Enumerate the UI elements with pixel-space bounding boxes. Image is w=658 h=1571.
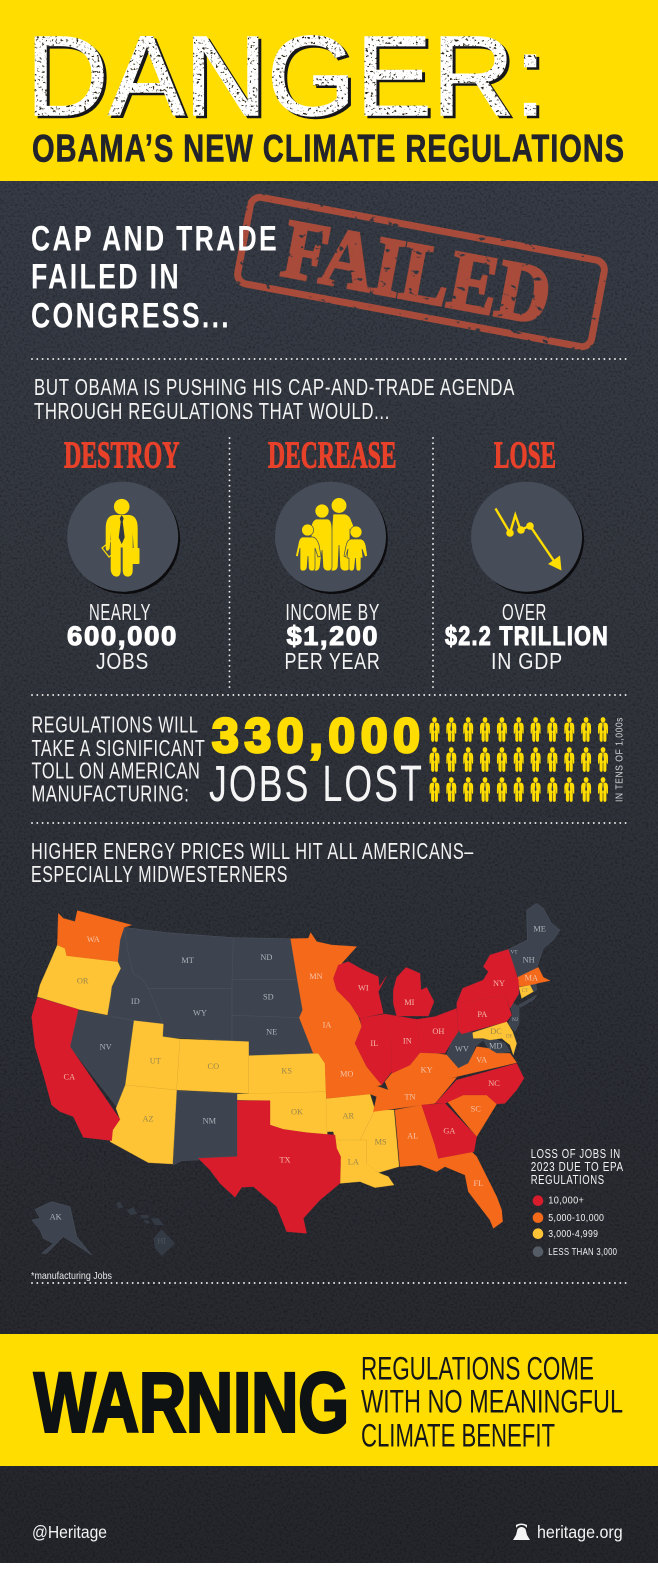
- stat: nearly 600,000 jobs: JOBS: [96, 648, 149, 674]
- intro text: THROUGH REGULATIONS THAT WOULD...: [34, 398, 390, 424]
- footer: handle: @Heritage: [32, 1522, 107, 1542]
- warning text: CLIMATE BENEFIT: [361, 1418, 555, 1454]
- header band: [0, 0, 658, 181]
- states: 10,000 or more: IN: [403, 1037, 412, 1046]
- warning band: [0, 1334, 658, 1466]
- intro text: [34, 374, 515, 424]
- map: US states: [32, 903, 560, 1256]
- stat: income by $1,200 per year: [284, 599, 380, 674]
- text: manufacturing toll: [32, 712, 206, 807]
- stamp: FAILED: FAILED: [276, 202, 558, 343]
- icon: falling chart: [471, 482, 584, 594]
- states: less than 3,000: NJ: [512, 1017, 518, 1023]
- legend items: [533, 1194, 617, 1258]
- legend title: [531, 1147, 624, 1187]
- states: 3,000 to 4,999: MS: [375, 1137, 387, 1146]
- heading: cap and trade failed: [31, 220, 279, 335]
- states: less than 3,000: HI: [157, 1236, 166, 1245]
- legend items: 3,000-4,999: [548, 1228, 598, 1240]
- states: less than 3,000: MT: [181, 956, 194, 965]
- states: 10,000 or more: WI: [358, 983, 369, 992]
- states: 5,000 to 10,000: FL: [473, 1179, 483, 1188]
- states: 5,000 to 10,000: AL: [407, 1132, 418, 1141]
- legend items: LESS THAN 3,000: [548, 1246, 617, 1258]
- legend title: REGULATIONS: [531, 1173, 605, 1187]
- states: 5,000 to 10,000: MO: [340, 1069, 353, 1078]
- states: less than 3,000: [32, 903, 560, 1256]
- states: 10,000 or more: NY: [493, 979, 505, 988]
- states: 5,000 to 10,000: VA: [476, 1055, 487, 1064]
- legend items: 10,000+: [548, 1194, 584, 1206]
- states: 10,000 or more: PA: [477, 1010, 487, 1019]
- states: 10,000 or more: GA: [443, 1126, 455, 1135]
- states: 5,000 to 10,000: [57, 911, 550, 1228]
- states: 3,000 to 4,999: UT: [150, 1056, 161, 1065]
- states: 10,000 or more: MI: [404, 998, 415, 1007]
- stat: income by $1,200 per year: INCOME BY: [285, 599, 380, 625]
- states: less than 3,000: AK: [50, 1213, 62, 1222]
- states: less than 3,000: VT: [510, 950, 518, 956]
- legend title: 2023 DUE TO EPA: [531, 1160, 624, 1174]
- stat: over $2.2 trillion in GDP: IN GDP: [491, 648, 563, 674]
- heading: energy prices: [31, 838, 474, 887]
- unit note: IN TENS OF 1,000s: [614, 717, 626, 802]
- stat: over $2.2 trillion in GDP: OVER: [502, 599, 547, 625]
- warning text: [361, 1350, 623, 1454]
- heading: cap and trade failed: CONGRESS...: [31, 296, 231, 335]
- stat: nearly 600,000 jobs: NEARLY: [89, 599, 151, 625]
- stat: nearly 600,000 jobs: 600,000: [67, 621, 178, 651]
- states: less than 3,000: ME: [533, 924, 546, 933]
- stat: over $2.2 trillion in GDP: $2.2 TRILLION: [445, 621, 609, 651]
- legend title: LOSS OF JOBS IN: [531, 1147, 621, 1161]
- text: manufacturing toll: REGULATIONS WILL: [32, 712, 198, 738]
- states: 10,000 or more: TX: [279, 1156, 291, 1165]
- states: 3,000 to 4,999: DE: [506, 1035, 513, 1040]
- states: 5,000 to 10,000: SC: [471, 1105, 481, 1114]
- heading: destroy: DESTROY: [64, 434, 180, 476]
- states: 3,000 to 4,999: OK: [291, 1107, 303, 1116]
- icon: liberty bell: [513, 1524, 530, 1540]
- states: 3,000 to 4,999: CT: [522, 988, 529, 994]
- states: less than 3,000: ND: [260, 953, 272, 962]
- states: 5,000 to 10,000: WA: [87, 935, 100, 944]
- panel: lose GDP: [445, 434, 609, 674]
- panel: decrease income: [268, 434, 396, 674]
- title: DANGER: DANGER:: [29, 16, 549, 142]
- heading: energy prices: ESPECIALLY MIDWESTERNERS: [31, 861, 288, 887]
- states: 10,000 or more: IL: [370, 1039, 378, 1048]
- stat: income by $1,200 per year: $1,200: [287, 621, 379, 651]
- pictogram: workers: [430, 717, 608, 802]
- states: less than 3,000: MD: [489, 1041, 502, 1050]
- icon: businessman: [67, 482, 180, 594]
- stat: nearly 600,000 jobs: [67, 599, 178, 674]
- warning word: WARNING: [34, 1356, 349, 1450]
- states: less than 3,000: WV: [455, 1044, 469, 1053]
- states: 3,000 to 4,999: [37, 945, 533, 1188]
- legend: [531, 1147, 624, 1258]
- states: 3,000 to 4,999: CO: [208, 1062, 219, 1071]
- states: 10,000 or more: [32, 949, 524, 1233]
- states: 10,000 or more: OH: [432, 1027, 444, 1036]
- text: manufacturing toll: TAKE A SIGNIFICANT: [32, 735, 206, 761]
- stat: 330,000: 330,000: [212, 710, 420, 763]
- text: manufacturing toll: TOLL ON AMERICAN: [32, 758, 200, 784]
- heading: lose: LOSE: [494, 434, 556, 476]
- icon: family: [275, 482, 388, 594]
- stat: jobs lost: JOBS LOST: [209, 755, 424, 812]
- states: less than 3,000: SD: [263, 992, 274, 1001]
- states: 5,000 to 10,000: MA: [525, 974, 538, 983]
- states: 3,000 to 4,999: DC: [490, 1027, 502, 1036]
- states: 3,000 to 4,999: AR: [343, 1112, 355, 1121]
- states: 3,000 to 4,999: LA: [348, 1157, 359, 1166]
- title: DANGER: DANGER:: [26, 13, 546, 139]
- heading: decrease: DECREASE: [268, 434, 396, 476]
- states: less than 3,000: WY: [193, 1009, 207, 1018]
- states: 3,000 to 4,999: KS: [281, 1067, 292, 1076]
- states: 5,000 to 10,000: KY: [421, 1066, 433, 1075]
- legend items: 5,000-10,000: [548, 1212, 604, 1224]
- footer: website: heritage.org: [537, 1522, 623, 1542]
- heading: cap and trade failed: CAP AND TRADE: [31, 220, 279, 258]
- states: 3,000 to 4,999: OR: [77, 976, 89, 985]
- heading: energy prices: HIGHER ENERGY PRICES WILL HIT ALL AMERICANS–: [31, 838, 474, 864]
- states: less than 3,000: NE: [266, 1028, 277, 1037]
- heading: cap and trade failed: FAILED IN: [31, 258, 181, 297]
- states: 5,000 to 10,000: TN: [404, 1092, 416, 1101]
- footnote: *manufacturing Jobs: [31, 1270, 112, 1282]
- states: less than 3,000: NH: [523, 955, 535, 964]
- stat: income by $1,200 per year: PER YEAR: [284, 648, 380, 674]
- states: less than 3,000: ID: [131, 997, 140, 1006]
- states: less than 3,000: NV: [100, 1042, 112, 1051]
- stat: over $2.2 trillion in GDP: [445, 599, 609, 674]
- states: 3,000 to 4,999: AZ: [142, 1114, 154, 1123]
- text: manufacturing toll: MANUFACTURING:: [32, 781, 190, 807]
- states: less than 3,000: NM: [203, 1116, 217, 1125]
- panel: destroy jobs: [64, 434, 180, 674]
- states: 5,000 to 10,000: MN: [309, 972, 323, 981]
- states: 5,000 to 10,000: IA: [323, 1020, 331, 1029]
- states: 10,000 or more: CA: [64, 1072, 75, 1081]
- states: 10,000 or more: NC: [488, 1079, 500, 1088]
